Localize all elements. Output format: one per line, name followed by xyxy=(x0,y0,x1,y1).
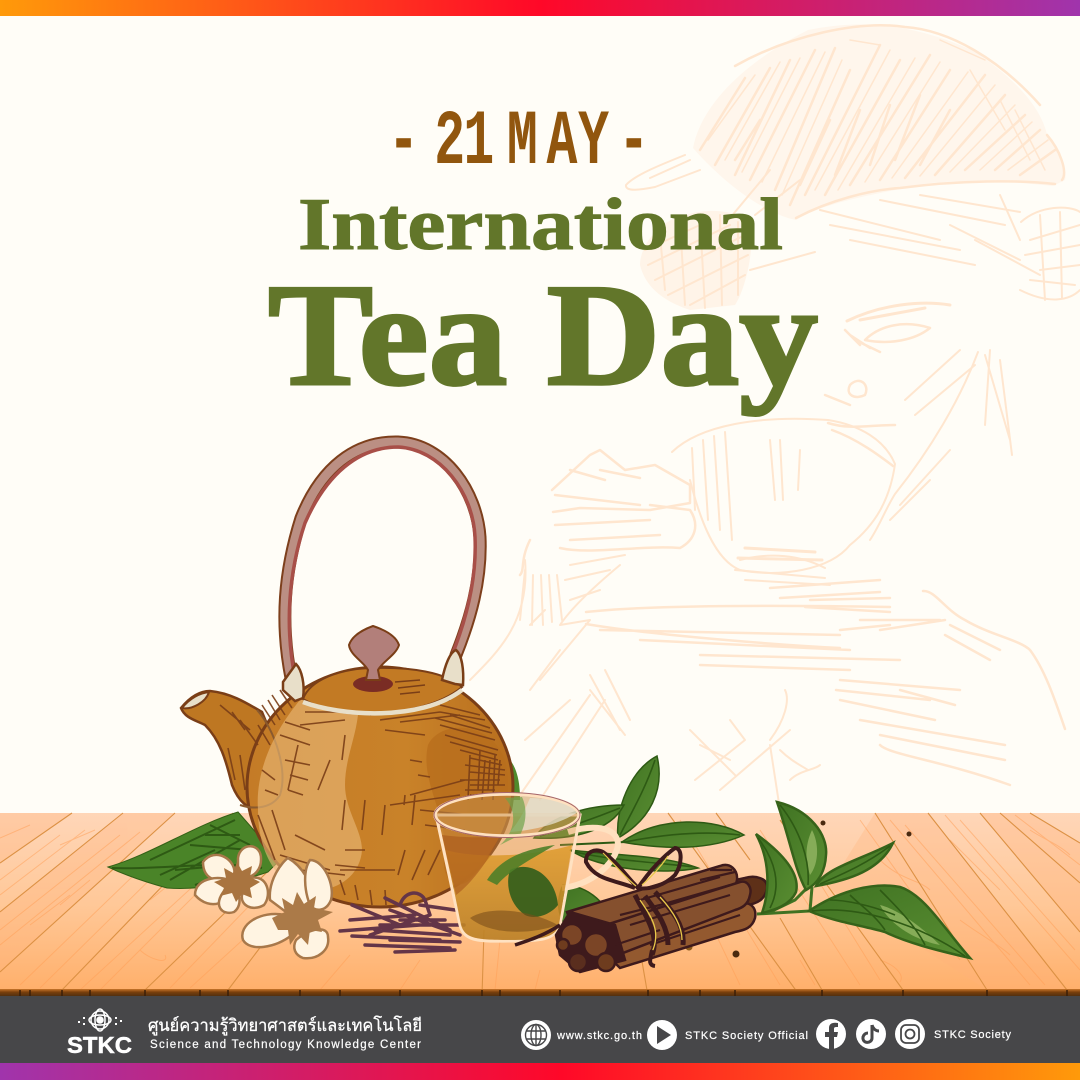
sprig side leaf xyxy=(816,843,893,886)
glass inner xyxy=(435,793,579,837)
stem xyxy=(560,842,625,845)
icon: youtube play xyxy=(647,1020,677,1050)
tea sprig xyxy=(756,802,970,958)
knob base xyxy=(353,676,393,692)
leaf peeking behind teapot right xyxy=(510,760,520,800)
date heading: - 21 MAY - xyxy=(388,98,649,187)
sketch: hair bangs at forehead xyxy=(640,211,815,310)
organisation name Thai: ศูนย์ความรู้วิทยาศาสตร์และเทคโนโลยี xyxy=(148,1015,422,1036)
handle lug left xyxy=(283,664,304,701)
leaf low xyxy=(570,850,698,871)
flower: large xyxy=(242,858,333,958)
plank seams xyxy=(0,813,1080,996)
youtube label: STKC Society Official xyxy=(685,1030,808,1042)
pot seen through glass xyxy=(442,835,500,895)
tea liquid xyxy=(446,845,572,940)
flower stamens xyxy=(272,892,333,945)
sketch: right arm xyxy=(840,591,1065,729)
stick lower xyxy=(600,903,755,968)
lid rim xyxy=(303,690,462,713)
sprig large leaf xyxy=(809,886,970,958)
stick texture xyxy=(615,870,740,945)
lid xyxy=(303,668,462,714)
stick ends xyxy=(561,924,583,946)
spout opening xyxy=(182,692,209,708)
pot body xyxy=(247,667,513,907)
sprig leaf veins xyxy=(758,805,965,956)
body shade xyxy=(426,728,508,885)
lid lines xyxy=(395,680,425,694)
leaf behind teapot xyxy=(108,812,280,888)
title: International: International xyxy=(298,184,783,266)
sketch: jaw and neck xyxy=(870,350,1012,540)
glass cup with tea xyxy=(434,792,618,945)
sketch: eye and nose xyxy=(825,324,930,466)
glass rim xyxy=(435,794,579,836)
teapot xyxy=(181,442,513,907)
handle xyxy=(285,442,480,678)
leaf top xyxy=(618,756,659,838)
sprig small leaf xyxy=(756,834,797,913)
edge grain xyxy=(20,990,1067,996)
cinnamon sticks xyxy=(556,848,767,972)
leaf mid right xyxy=(622,822,744,847)
dried tea leaves xyxy=(340,893,464,952)
stick back right xyxy=(620,877,767,940)
title: Tea Day: Tea Day xyxy=(268,254,818,416)
organisation name English: Science and Technology Knowledge Center xyxy=(150,1039,421,1051)
sprig stem xyxy=(757,885,812,914)
icon: tiktok xyxy=(856,1019,886,1049)
glass body xyxy=(436,815,580,941)
sketch: left hand xyxy=(520,450,695,575)
cup handle xyxy=(562,828,618,888)
spout outline over body xyxy=(240,710,282,808)
sketch: left arm xyxy=(470,555,625,690)
wood grain xyxy=(0,815,1080,990)
string binding xyxy=(635,892,683,955)
leaf veins xyxy=(540,760,740,867)
sketch: brow and forehead shading xyxy=(820,195,1040,321)
stick upper xyxy=(567,865,737,940)
sketch: bun xyxy=(1020,208,1080,300)
sprig light patches xyxy=(806,830,940,945)
leaf lower xyxy=(559,885,612,925)
body highlight xyxy=(258,686,362,891)
icon: facebook xyxy=(816,1019,846,1049)
sketch: lower garment folds xyxy=(520,665,1010,810)
table front edge xyxy=(0,989,1080,996)
bottom gradient bar xyxy=(0,1063,1080,1080)
illustration: woman drinking tea sketch xyxy=(470,24,1080,810)
flower: small xyxy=(195,846,268,913)
knob xyxy=(349,626,399,680)
sketch: saucer xyxy=(586,580,900,660)
tea leaves in glass xyxy=(508,867,558,917)
plank tint bands xyxy=(0,813,1080,990)
stick middle xyxy=(590,882,751,958)
leaf upper left xyxy=(534,805,624,838)
icon: globe xyxy=(521,1020,551,1050)
spout xyxy=(181,691,290,809)
sketch: hair xyxy=(626,24,1066,230)
stick ends mass xyxy=(556,912,625,972)
wooden table xyxy=(0,813,1080,996)
knots xyxy=(686,820,912,958)
flower stamens xyxy=(214,862,260,902)
string bow xyxy=(586,848,681,966)
etched lines xyxy=(220,690,505,905)
website: www.stkc.go.th xyxy=(556,1030,642,1042)
sketch: tea cup xyxy=(672,419,895,585)
logo wordmark: STKC xyxy=(67,1032,132,1058)
logo: STKC xyxy=(67,1009,132,1058)
top gradient bar xyxy=(0,0,1080,16)
logo icon xyxy=(78,1009,122,1031)
sprig upper leaf xyxy=(777,802,826,890)
branch leaves behind glass xyxy=(534,756,744,925)
icon: instagram xyxy=(895,1019,925,1049)
footer bar xyxy=(0,996,1080,1063)
handle lug right xyxy=(442,650,463,685)
twine end xyxy=(515,925,560,945)
instagram label: STKC Society xyxy=(934,1029,1012,1041)
